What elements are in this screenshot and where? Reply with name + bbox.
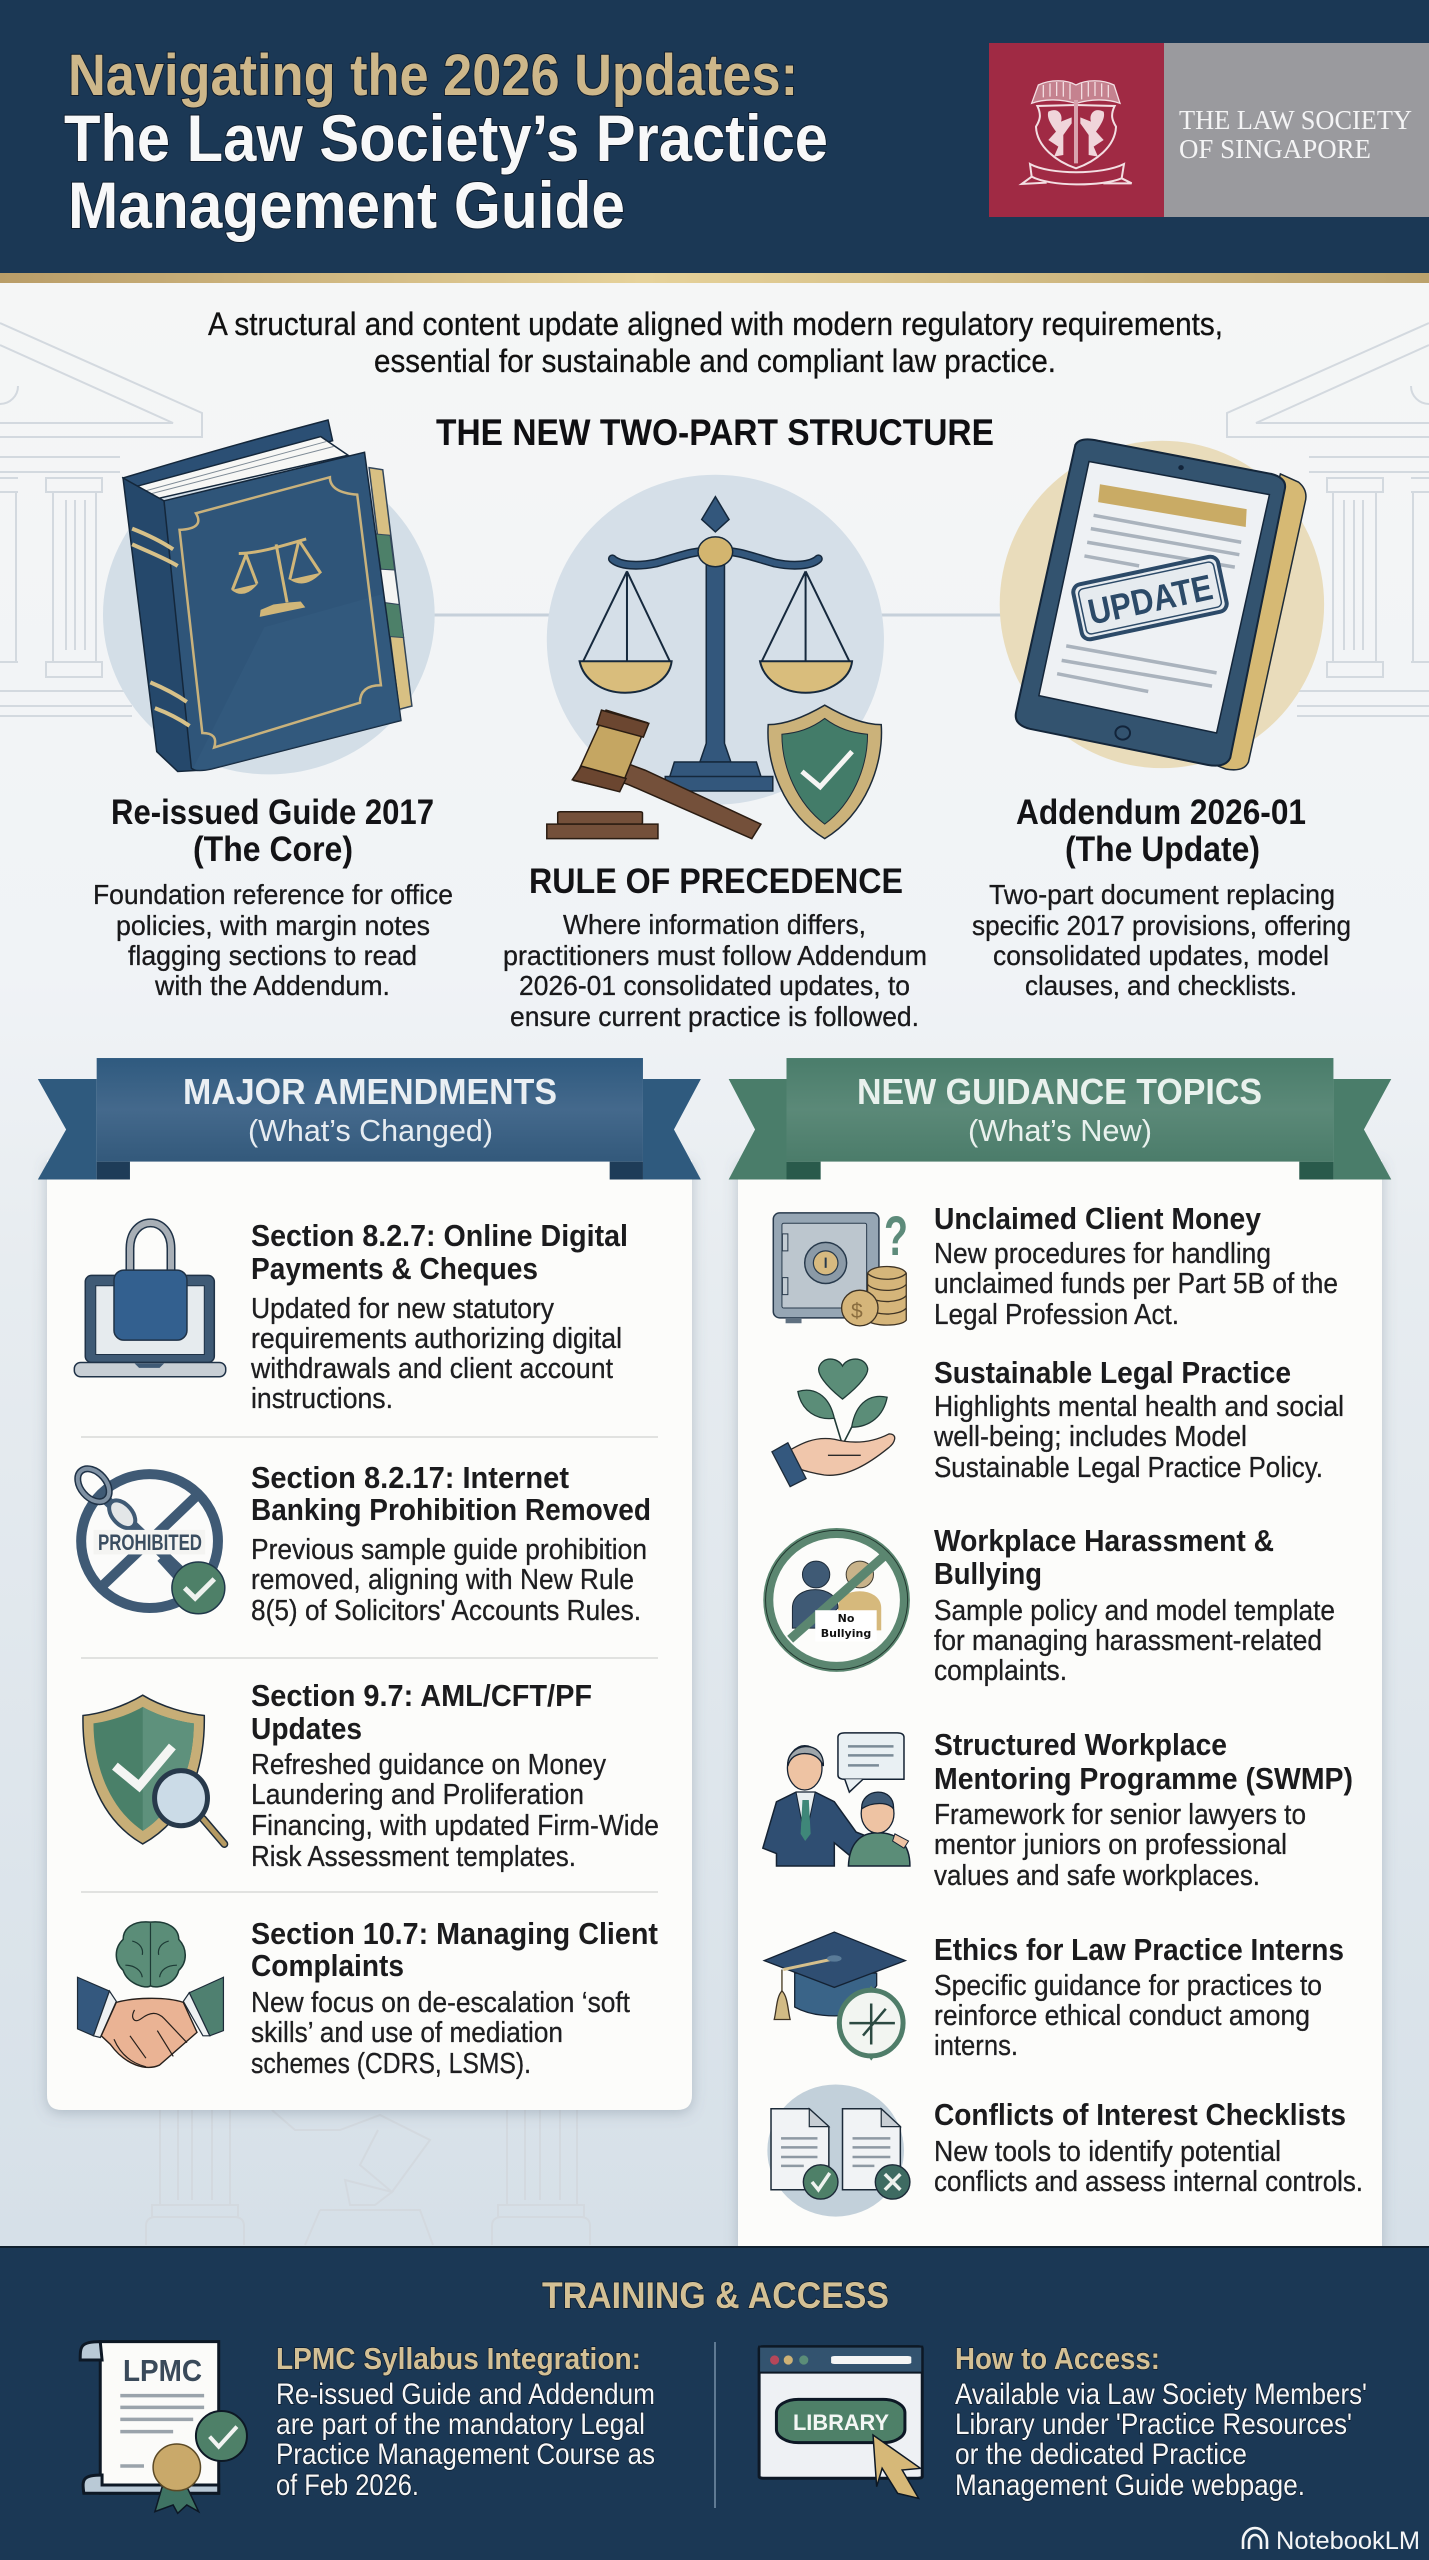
- item: conflicts of interest checklists: conflicts and assess internal controls.: [934, 2166, 1363, 2198]
- text: LPMC syllabus integration: of Feb 2026.: [276, 2469, 419, 2502]
- intro text: [208, 306, 1223, 379]
- item: sustainable legal practice: well-being; includes Model: [933, 1421, 1247, 1453]
- icon: re-issued guide book: [103, 420, 435, 774]
- logo wordmark: THE LAW SOCIETY: [1179, 105, 1412, 135]
- item: section 8.2.17: removed, aligning with New Rule: [251, 1564, 634, 1596]
- item: section 9.7: Laundering and Proliferation: [251, 1779, 584, 1811]
- item: ethics for law practice interns: reinforce ethical conduct among: [934, 2000, 1310, 2032]
- ribbon: major amendments: MAJOR AMENDMENTS: [183, 1071, 557, 1112]
- item: section 9.7: Risk Assessment templates.: [251, 1841, 576, 1873]
- panel: major amendments: [38, 1058, 701, 2110]
- item: conflicts of interest checklists: Conflicts of Interest Checklists: [934, 2097, 1346, 2132]
- card text: addendum: (The Update): [1065, 830, 1260, 869]
- item: section 9.7: Updates: [251, 1711, 362, 1746]
- item: workplace harassment and bullying: for managing harassment-related: [934, 1625, 1322, 1657]
- icon: mentor and junior: [763, 1733, 910, 1866]
- card text: re-issued guide: policies, with margin notes: [116, 910, 430, 941]
- icon: scales with gavel and shield: [547, 475, 884, 839]
- item: unclaimed client money: Legal Profession Act.: [934, 1299, 1179, 1331]
- card text: rule of precedence: practitioners must follow Addendum: [503, 940, 927, 971]
- icon: no bullying sign: [766, 1530, 908, 1670]
- title: [64, 43, 828, 242]
- item: structured workplace mentoring programme: Structured Workplace: [934, 1727, 1227, 1762]
- item: section 8.2.7: Payments & Cheques: [251, 1251, 538, 1286]
- ribbon: new guidance topics: [729, 1058, 1391, 1179]
- item: section 10.7: [78, 1916, 658, 2080]
- connector lines between circles: [430, 614, 1005, 616]
- item: section 8.2.17: Banking Prohibition Removed: [251, 1492, 651, 1527]
- text: how to access: [955, 2341, 1367, 2502]
- icon: prohibited sign with broken chain: PROHIBITED: [98, 1530, 202, 1555]
- item: section 10.7: skills’ and use of mediation: [251, 2017, 563, 2049]
- item: conflicts of interest checklists: New tools to identify potential: [934, 2136, 1281, 2168]
- icon: addendum tablet with update stamp: [1000, 439, 1324, 770]
- card text: rule of precedence: 2026-01 consolidated updates, to: [519, 970, 910, 1001]
- logo: The Law Society of Singapore: [989, 43, 1429, 217]
- panel: new guidance topics: [729, 1058, 1391, 2250]
- card text: re-issued guide: [93, 793, 453, 1001]
- icon: safe with coins: ?: [884, 1204, 908, 1267]
- item: section 8.2.7: Updated for new statutory: [251, 1293, 554, 1325]
- item: workplace harassment and bullying: Workplace Harassment &: [934, 1523, 1274, 1558]
- icon: graduation cap and compass: [764, 1932, 905, 2061]
- ribbon: major amendments: [38, 1058, 701, 1179]
- text: LPMC syllabus integration: LPMC Syllabus Integration:: [276, 2341, 641, 2376]
- card text: addendum: specific 2017 provisions, offering: [972, 910, 1351, 941]
- ribbon: new guidance topics: (What’s New): [968, 1113, 1152, 1148]
- item: section 9.7: Section 9.7: AML/CFT/PF: [251, 1678, 592, 1713]
- item: section 8.2.7: withdrawals and client account: [250, 1353, 613, 1385]
- card text: addendum: [972, 793, 1351, 1001]
- item: ethics for law practice interns: Ethics for Law Practice Interns: [934, 1932, 1344, 1967]
- item: structured workplace mentoring programme: Mentoring Programme (SWMP): [934, 1761, 1353, 1796]
- icon: handshake and brain: [78, 1922, 223, 2067]
- card text: addendum: clauses, and checklists.: [1025, 970, 1297, 1001]
- footer heading: TRAINING & ACCESS: [542, 2275, 889, 2316]
- item: sustainable legal practice: Highlights mental health and social: [934, 1391, 1344, 1423]
- text: how to access: How to Access:: [955, 2341, 1160, 2376]
- item: section 8.2.7: Section 8.2.7: Online Digital: [251, 1218, 628, 1253]
- icon: LPMC certificate scroll: LPMC: [123, 2353, 202, 2388]
- background temple line art, left: [0, 323, 202, 716]
- icon: two checklist documents: [767, 2084, 910, 2217]
- card text: addendum: consolidated updates, model: [993, 940, 1329, 971]
- update stamp: UPDATE: [1084, 566, 1216, 633]
- dividers: [81, 1437, 658, 1892]
- footer divider: [714, 2342, 716, 2508]
- item: section 8.2.17: 8(5) of Solicitors' Accounts Rules.: [251, 1595, 641, 1627]
- card text: rule of precedence: [503, 862, 927, 1032]
- icon: library browser window with cursor: LIBRARY: [793, 2410, 889, 2435]
- item: workplace harassment and bullying: complaints.: [934, 1655, 1067, 1687]
- item: section 10.7: Section 10.7: Managing Client: [251, 1916, 658, 1951]
- background columns and gavel watermark, bottom: [146, 2105, 590, 2245]
- panel: header band: [0, 0, 1429, 283]
- item: section 10.7: Complaints: [251, 1948, 404, 1983]
- item: structured workplace mentoring programme: Framework for senior lawyers to: [934, 1799, 1306, 1831]
- item: ethics for law practice interns: Specific guidance for practices to: [934, 1970, 1322, 2002]
- item: ethics for law practice interns: interns.: [934, 2030, 1018, 2062]
- card text: addendum: Addendum 2026-01: [1016, 793, 1306, 832]
- panel: training and access footer: [0, 2246, 1429, 2560]
- card text: re-issued guide: with the Addendum.: [154, 970, 390, 1001]
- text: LPMC syllabus integration: are part of the mandatory Legal: [276, 2408, 645, 2441]
- icon: no bullying sign: Bullying: [821, 1627, 871, 1640]
- item: section 8.2.7: requirements authorizing digital: [251, 1323, 622, 1355]
- text: LPMC syllabus integration: Practice Management Course as: [276, 2438, 655, 2471]
- section heading: the new two-part structure: THE NEW TWO-PART STRUCTURE: [436, 412, 994, 453]
- icon: crest: [1022, 81, 1132, 184]
- card text: rule of precedence: ensure current practice is followed.: [510, 1001, 919, 1032]
- item: ethics for law practice interns: [764, 1932, 1344, 2062]
- item: sustainable legal practice: Sustainable Legal Practice Policy.: [934, 1452, 1323, 1484]
- item: section 9.7: Refreshed guidance on Money: [251, 1749, 606, 1781]
- item: sustainable legal practice: [772, 1355, 1344, 1487]
- background temple line art, right: [1227, 323, 1429, 716]
- title: Management Guide: [68, 168, 625, 242]
- page background: [0, 283, 1429, 2248]
- icon: no bullying sign: No: [838, 1612, 855, 1625]
- gold divider bar: [0, 273, 1429, 283]
- item: workplace harassment and bullying: [766, 1523, 1335, 1687]
- NotebookLM watermark: NotebookLM: [1276, 2527, 1420, 2555]
- text: how to access: or the dedicated Practice: [955, 2438, 1247, 2471]
- card text: addendum: Two-part document replacing: [989, 879, 1335, 910]
- card text: re-issued guide: (The Core): [193, 830, 353, 869]
- item: structured workplace mentoring programme: mentor juniors on professional: [934, 1829, 1287, 1861]
- item: section 10.7: New focus on de-escalation ‘soft: [251, 1987, 630, 2019]
- title: The Law Society’s Practice: [64, 101, 828, 175]
- icon: LPMC certificate scroll: [80, 2342, 247, 2513]
- icon: hand holding plant and heart: [772, 1359, 895, 1487]
- item: section 8.2.17: Previous sample guide prohibition: [251, 1534, 647, 1566]
- text: LPMC syllabus integration: Re-issued Guide and Addendum: [276, 2378, 655, 2411]
- intro text: A structural and content update aligned with modern regulatory requirements,: [208, 306, 1223, 342]
- card text: re-issued guide: Re-issued Guide 2017: [111, 793, 434, 832]
- item: section 8.2.7: instructions.: [251, 1383, 393, 1415]
- icon: safe with coins: $: [851, 1300, 863, 1323]
- icon: laptop and padlock: [74, 1223, 226, 1377]
- item: sustainable legal practice: Sustainable Legal Practice: [934, 1355, 1291, 1390]
- item: unclaimed client money: unclaimed funds per Part 5B of the: [934, 1268, 1338, 1300]
- text: how to access: Available via Law Society Members': [955, 2378, 1367, 2411]
- item: section 8.2.17: [71, 1460, 651, 1627]
- item: section 9.7: Financing, with updated Firm-Wide: [251, 1810, 659, 1842]
- item: section 8.2.7: [74, 1218, 628, 1415]
- text: how to access: Library under 'Practice Resources': [955, 2408, 1352, 2441]
- item: structured workplace mentoring programme: [763, 1727, 1353, 1892]
- item: unclaimed client money: [773, 1201, 1338, 1331]
- item: workplace harassment and bullying: Sample policy and model template: [934, 1595, 1335, 1627]
- card text: rule of precedence: Where information differs,: [563, 909, 866, 940]
- text: LPMC syllabus integration: [276, 2341, 655, 2502]
- logo wordmark: [1179, 105, 1412, 164]
- item: workplace harassment and bullying: Bullying: [934, 1556, 1042, 1591]
- card text: re-issued guide: flagging sections to read: [128, 940, 417, 971]
- item: unclaimed client money: New procedures for handling: [934, 1238, 1271, 1270]
- item: structured workplace mentoring programme: values and safe workplaces.: [934, 1860, 1260, 1892]
- item: section 8.2.17: Section 8.2.17: Internet: [251, 1460, 569, 1495]
- card text: rule of precedence: RULE OF PRECEDENCE: [529, 862, 903, 901]
- icon: shield with magnifier: [83, 1695, 224, 1844]
- title: Navigating the 2026 Updates:: [68, 43, 798, 108]
- item: conflicts of interest checklists: [767, 2084, 1363, 2217]
- logo wordmark: OF SINGAPORE: [1179, 134, 1371, 164]
- item: section 10.7: schemes (CDRS, LSMS).: [251, 2048, 531, 2080]
- icon: prohibited sign with broken chain: [71, 1463, 225, 1614]
- icon: library browser window with cursor: [759, 2347, 922, 2498]
- intro text: essential for sustainable and compliant law practice.: [374, 343, 1056, 379]
- ribbon: new guidance topics: NEW GUIDANCE TOPICS: [857, 1071, 1262, 1112]
- item: unclaimed client money: Unclaimed Client Money: [934, 1201, 1262, 1236]
- card text: re-issued guide: Foundation reference for office: [93, 879, 453, 910]
- text: how to access: Management Guide webpage.: [955, 2469, 1305, 2502]
- item: section 9.7: [83, 1678, 659, 1873]
- ribbon: major amendments: (What’s Changed): [248, 1113, 493, 1148]
- icon: safe with coins: [773, 1204, 908, 1326]
